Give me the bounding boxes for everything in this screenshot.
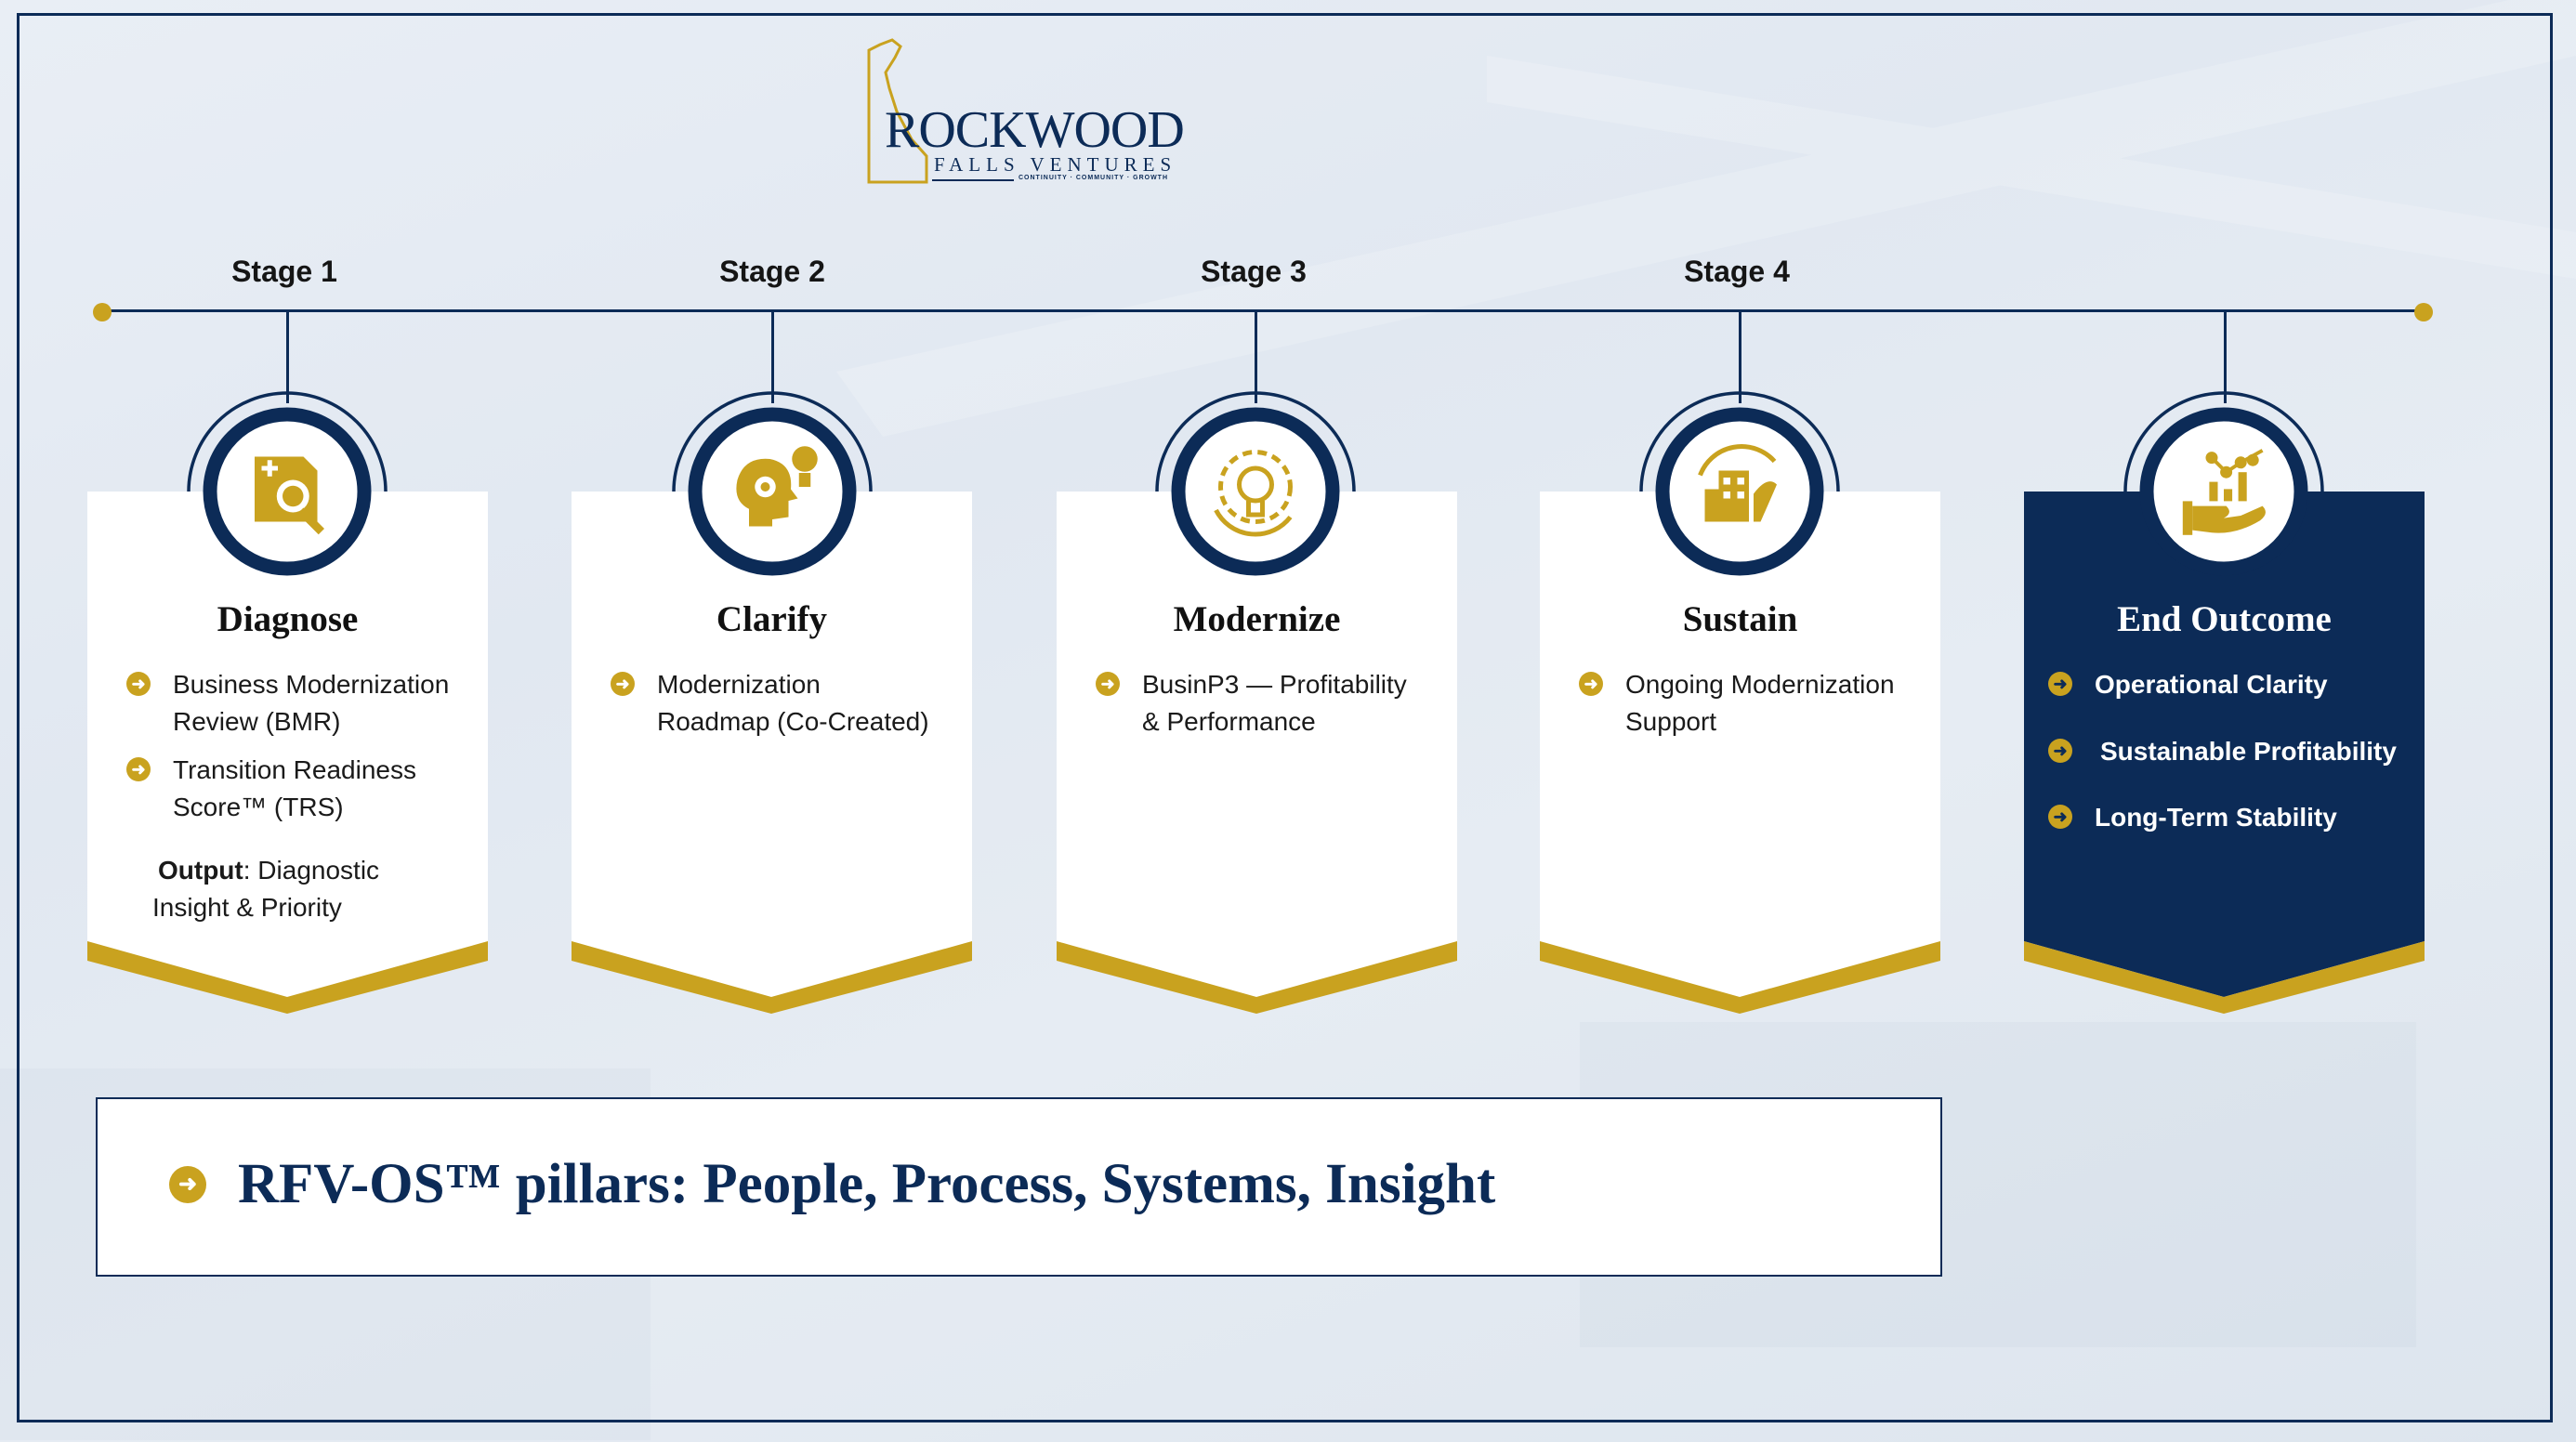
card: End Outcome xyxy=(2024,492,2425,1014)
card: Sustain: Support xyxy=(1625,707,1716,736)
card: Clarify: Roadmap (Co-Created) xyxy=(657,707,929,736)
text: Stage 3 xyxy=(1201,255,1307,288)
card: End Outcome: Operational Clarity xyxy=(2095,670,2328,699)
card: Diagnose: ➜ xyxy=(131,675,146,693)
card: Diagnose: Transition Readiness xyxy=(173,755,416,784)
card: Modernize: Modernize xyxy=(1174,599,1340,639)
card: Modernize: BusinP3 — Profitability xyxy=(1142,670,1407,699)
card: End Outcome: ➜ xyxy=(2053,675,2068,693)
card: Diagnose xyxy=(87,492,488,1014)
card: End Outcome: End Outcome xyxy=(2117,599,2332,639)
card: Sustain: ➜ xyxy=(1584,675,1598,693)
logo: CONTINUITY · COMMUNITY · GROWTH xyxy=(1019,175,1168,181)
card: Diagnose: Insight & Priority xyxy=(152,893,342,922)
card: Sustain xyxy=(1540,492,1940,1014)
card: Diagnose: Review (BMR) xyxy=(173,707,340,736)
card: End Outcome: ➜ xyxy=(2053,807,2068,826)
bottom callout: pillars: ➜ xyxy=(178,1172,197,1197)
card: End Outcome: ➜ xyxy=(2053,741,2068,760)
logo xyxy=(868,38,1184,184)
card: Clarify xyxy=(572,492,972,1014)
icon circle: End Outcome xyxy=(2123,391,2324,561)
icon circle: Modernize xyxy=(1155,391,1356,576)
bottom callout: pillars xyxy=(96,1097,1942,1277)
card: Diagnose: Score™ (TRS) xyxy=(173,793,344,821)
timeline xyxy=(93,303,2433,321)
card: Modernize: & Performance xyxy=(1142,707,1316,736)
text: Stage 4 xyxy=(1684,255,1790,288)
icon circle: Sustain xyxy=(1639,391,1840,576)
card: Diagnose: Business Modernization xyxy=(173,670,449,699)
card: End Outcome: Long-Term Stability xyxy=(2095,803,2337,832)
card: Sustain: Sustain xyxy=(1683,599,1797,639)
card: End Outcome: Sustainable Profitability xyxy=(2100,737,2397,766)
card: Diagnose: Diagnose xyxy=(217,599,358,639)
card: Clarify: ➜ xyxy=(615,675,630,693)
card: Modernize xyxy=(1057,492,1457,1014)
icon circle: Diagnose xyxy=(187,391,388,576)
card: Modernize: ➜ xyxy=(1100,675,1115,693)
text: Stage 2 xyxy=(719,255,825,288)
logo: ROCKWOOD xyxy=(885,101,1184,159)
stage labels: Stage 1 xyxy=(231,255,337,288)
logo: FALLS VENTURES xyxy=(934,153,1176,176)
bottom callout: pillars: RFV-OS™ pillars: People, Process, Systems, Insight xyxy=(238,1153,1495,1215)
card: Clarify: Clarify xyxy=(716,599,827,639)
card: Clarify: Modernization xyxy=(657,670,821,699)
card: Sustain: Ongoing Modernization xyxy=(1625,670,1895,699)
icon circle: Clarify xyxy=(672,391,873,576)
card: Diagnose: Output: Diagnostic xyxy=(158,856,379,885)
card: Diagnose: ➜ xyxy=(131,760,146,779)
